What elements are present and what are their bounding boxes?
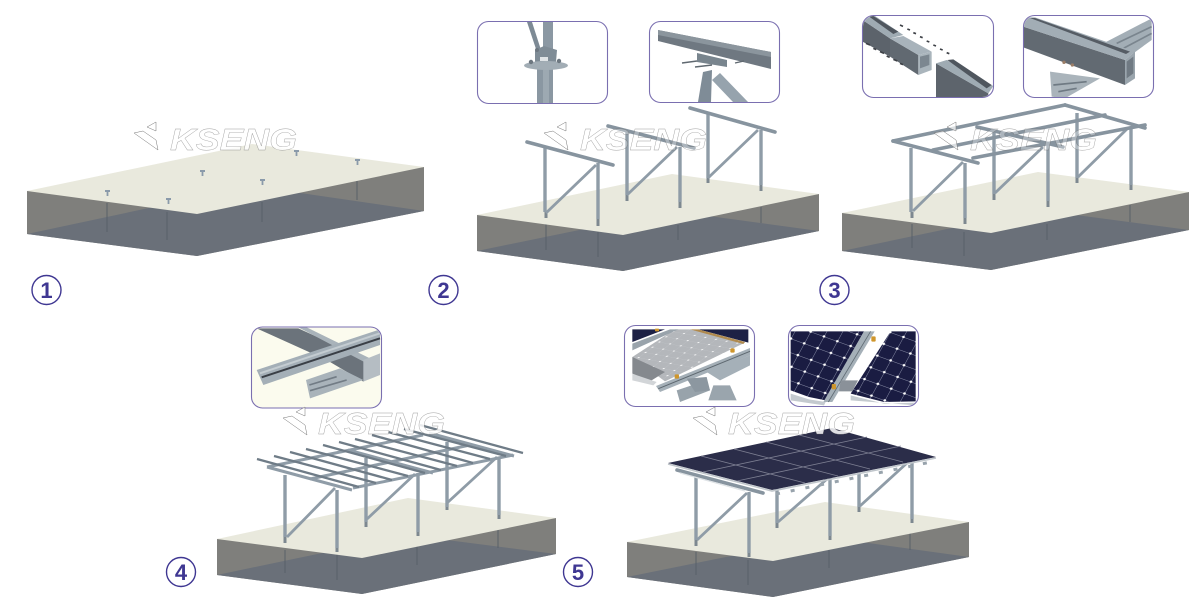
panel: step 1 foundation: [27, 144, 424, 304]
panel: step 3 main beams: [820, 13, 1189, 305]
foundation block 1: [27, 144, 424, 256]
solar array: [668, 428, 936, 491]
watermark: step 3: [934, 122, 1097, 157]
watermark: step 2: KSENG: [580, 122, 707, 157]
frames under the array: [677, 461, 936, 557]
foundation block 2: [477, 174, 819, 271]
step number 5: 5: [572, 560, 584, 585]
step number 1: 1: [40, 278, 53, 303]
panel: step 2 brackets: [429, 22, 819, 304]
panel: step 4 purlins: [166, 327, 556, 594]
watermark: step 5: [693, 406, 855, 441]
inset: rail connection detail: [650, 22, 780, 102]
inset: clamps between modules: [788, 326, 918, 406]
inset: beam crossing detail: [1023, 16, 1154, 98]
watermark: step 2: [544, 122, 707, 157]
support frames: [527, 108, 775, 226]
inset: purlin clamp detail: [252, 327, 382, 408]
watermark: step 3: KSENG: [970, 122, 1097, 157]
watermark: step 5: KSENG: [728, 406, 855, 441]
step number 2: [429, 276, 458, 304]
step number 4: [166, 558, 196, 586]
step number 5: [564, 558, 592, 586]
step number 3: 3: [828, 278, 841, 303]
inset: beam splice detail: [862, 13, 994, 100]
frames, beams and purlins: [257, 425, 523, 552]
panel: step 5 solar modules: [564, 326, 969, 597]
step number 1: [32, 276, 61, 304]
inset: mid clamp on framed module: [624, 326, 754, 406]
watermark: step 1: KSENG: [170, 122, 297, 157]
watermark: step 4: [283, 406, 445, 441]
foundation block 3: [842, 172, 1189, 270]
watermark: step 1: [134, 122, 297, 157]
foundation block 4: [217, 498, 556, 594]
watermark: step 4: KSENG: [318, 406, 445, 441]
foundation block 5: [627, 502, 969, 597]
step number 3: [820, 276, 849, 304]
inset: post base detail: [478, 22, 608, 104]
step number 4: 4: [175, 560, 188, 585]
step number 2: 2: [437, 278, 450, 303]
frames and long beams: [893, 105, 1145, 224]
anchor bolts: [105, 150, 360, 204]
